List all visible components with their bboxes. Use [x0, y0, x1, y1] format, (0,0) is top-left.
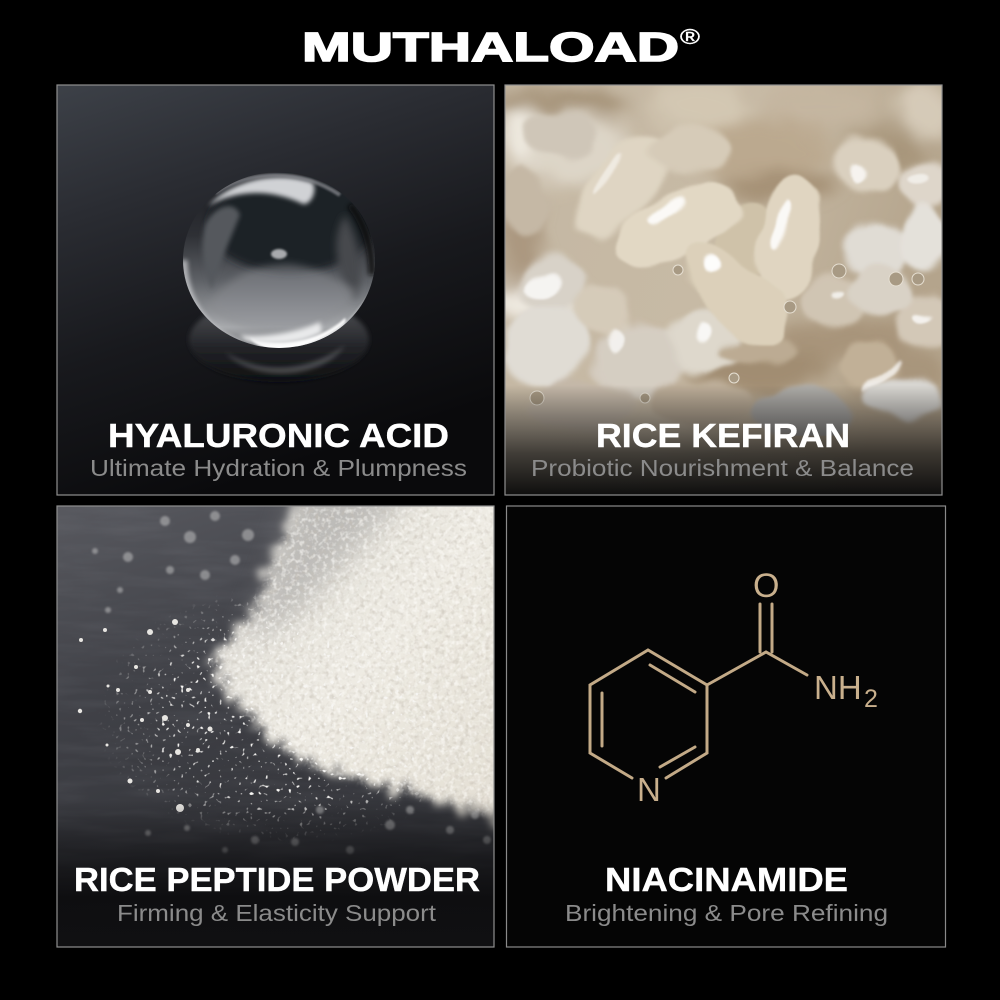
title	[302, 24, 701, 70]
icon: water droplet	[183, 172, 375, 382]
panel border	[57, 506, 494, 947]
subheading: rice kefiran: Probiotic Nourishment & Balance	[531, 455, 914, 481]
heading: niacinamide: NIACINAMIDE	[605, 861, 848, 898]
heading: hyaluronic acid: HYALURONIC ACID	[108, 417, 449, 454]
panel: rice peptide powder	[56, 505, 495, 948]
heading: rice kefiran: RICE KEFIRAN	[596, 417, 850, 454]
subheading: hyaluronic acid: Ultimate Hydration & Plumpness	[90, 455, 467, 481]
panel border	[505, 85, 942, 495]
panel: niacinamide	[506, 506, 946, 947]
title: ®	[680, 26, 701, 49]
icon: niacinamide molecule: O	[753, 567, 779, 605]
panel: hyaluronic acid	[57, 85, 494, 495]
image: rice grains	[490, 79, 955, 436]
icon: niacinamide molecule	[590, 567, 878, 808]
icon: niacinamide molecule: N	[637, 771, 661, 808]
title: MUTHALOAD	[302, 24, 679, 70]
panel: rice kefiran	[490, 79, 955, 495]
subheading: niacinamide: Brightening & Pore Refining	[565, 900, 888, 926]
panel border	[57, 85, 494, 495]
icon: niacinamide molecule: NH	[814, 669, 862, 706]
icon: niacinamide molecule: 2	[864, 685, 878, 713]
image: powder pile	[78, 506, 494, 854]
heading: rice peptide powder: RICE PEPTIDE POWDER	[74, 861, 480, 898]
subheading: rice peptide powder: Firming & Elasticity Support	[117, 900, 437, 926]
